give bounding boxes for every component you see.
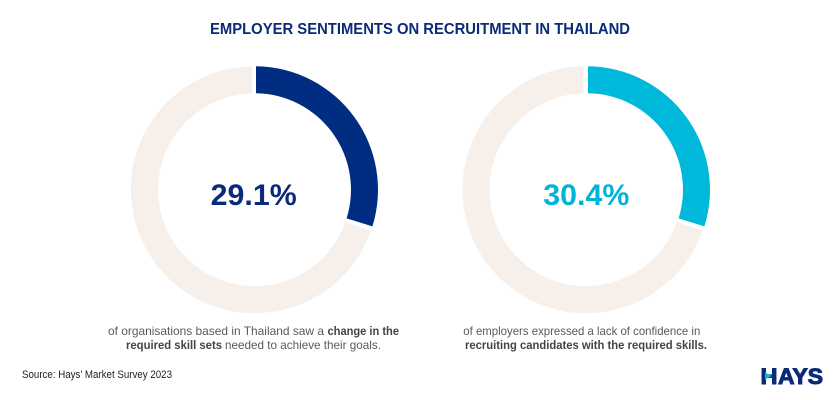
donut value segment [256,66,378,226]
panel: skill set change [108,66,399,352]
logo letter H: H [760,364,778,389]
description [463,324,707,352]
description: required skill sets [126,338,222,352]
description: of employers expressed a lack of confidence in [463,324,700,338]
description [108,324,399,352]
donut chart: 30.4% [462,66,710,313]
description: of organisations based in Thailand saw a [108,324,324,338]
donut value segment [588,66,710,226]
description: needed to achieve their goals. [225,338,381,352]
logo letters AYS: AYS [778,364,823,389]
donut chart: 29.1% [131,66,378,313]
value: 30.4%: 30.4% [543,179,629,212]
description: change in the [328,324,399,338]
description: recruiting candidates with the required skills. [465,338,707,352]
source note: Source: Hays’ Market Survey 2023 [22,369,172,381]
logo: Hays [760,364,823,389]
logo arrow accent [765,372,772,380]
donut remainder [462,66,702,313]
value: 29.1%: 29.1% [211,179,297,212]
panel: recruiting confidence [462,66,710,352]
title: EMPLOYER SENTIMENTS ON RECRUITMENT IN THAILAND [210,21,630,38]
donut remainder [131,66,371,313]
